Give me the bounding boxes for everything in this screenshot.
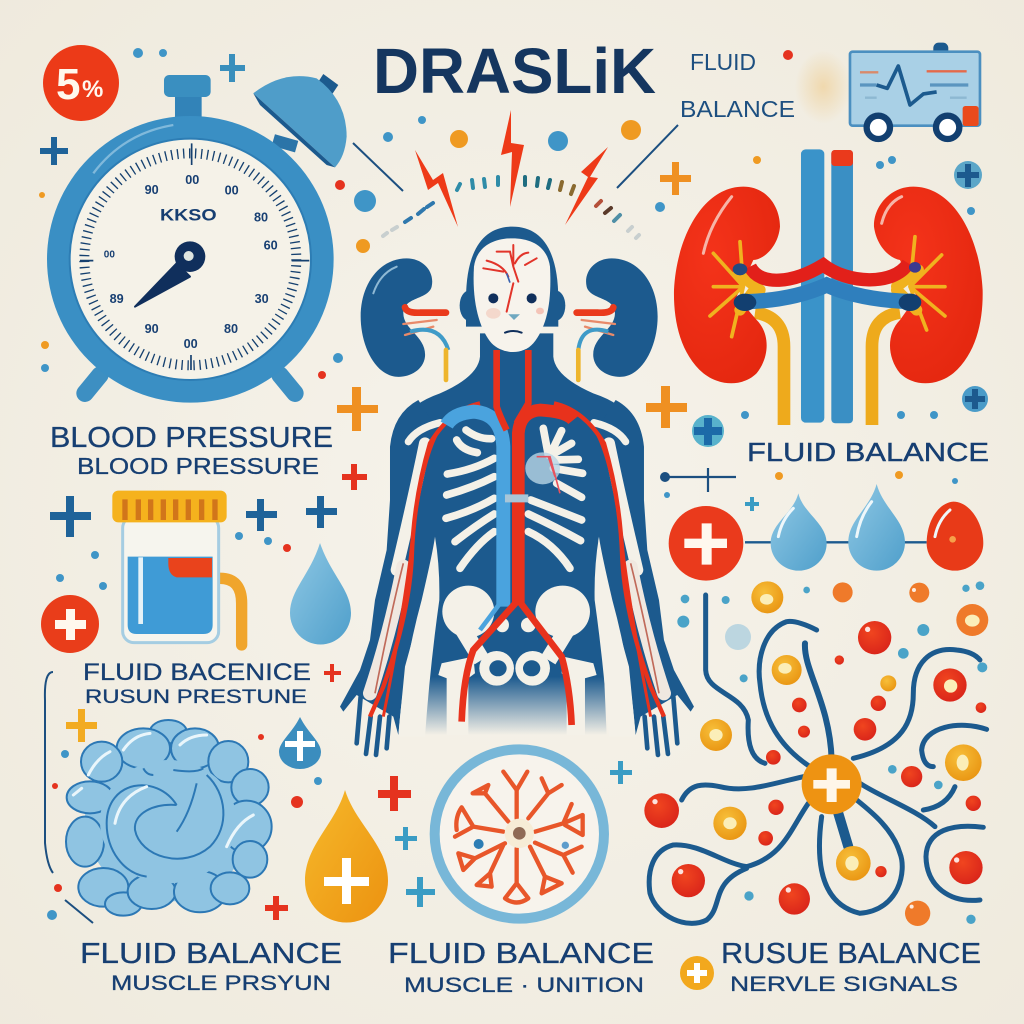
badge: 5%: %: [82, 76, 103, 103]
label: fluid balance bottom left: MUSCLE PRSYUN: [111, 972, 331, 995]
heart: [525, 452, 560, 484]
nerve network: [644, 581, 988, 926]
label: fluid balance center: [388, 938, 654, 997]
label: blood pressure: BLOOD PRESSURE: [50, 422, 333, 454]
gauge: blood pressure: 00: [225, 184, 239, 198]
gauge: blood pressure: 90: [145, 183, 159, 197]
pale ball: [725, 624, 751, 650]
pointer lines: [45, 125, 678, 923]
gauge: blood pressure: 60: [264, 239, 278, 253]
ball highlights: [709, 594, 980, 871]
gauge: blood pressure: 80: [254, 210, 268, 224]
icon: plus drop: [279, 717, 321, 769]
lightning bolts: [415, 110, 608, 227]
label: blood pressure: BLOOD PRESSURE: [77, 453, 319, 479]
label: rusue balance: [721, 938, 981, 996]
large kidneys: [674, 149, 983, 425]
pelvic openings: [489, 660, 540, 676]
icon: orange drop: [305, 790, 388, 922]
label: fluid balance left: [83, 659, 311, 708]
central vessels: [447, 350, 573, 725]
scattered dots: [39, 48, 975, 920]
gauge: blood pressure: 30: [255, 292, 269, 306]
small pale and teal dots: [677, 581, 987, 924]
gauge: blood pressure: 00: [185, 173, 199, 187]
icon: plus badge left: [41, 595, 99, 653]
label: fluid balance bottom left: [80, 938, 342, 995]
heading: fluid balance top right: FLUID: [690, 49, 756, 75]
title: DRASLiK: [373, 35, 656, 107]
label: fluid balance left: FLUID BACENICE: [83, 659, 311, 686]
arc ticks: [383, 177, 639, 238]
gauge: blood pressure: 00: [184, 337, 198, 351]
pelvis bones: [438, 586, 597, 735]
blue plus discs: [692, 161, 988, 447]
orange plus signs: [66, 162, 691, 742]
drops row: [669, 484, 983, 581]
human body figure: [340, 333, 694, 755]
label: fluid balance center: FLUID BALANCE: [388, 938, 654, 970]
heading: fluid balance top right: BALANCE: [680, 96, 795, 122]
badge: 5%: [43, 45, 119, 121]
body torso: [403, 333, 630, 735]
gauge: blood pressure: 80: [224, 322, 238, 336]
circular cell: [435, 749, 604, 919]
icon: ambulance monitor: [795, 43, 980, 139]
icon: brain: [66, 720, 272, 916]
connector with cross: [660, 468, 736, 492]
label: rusue balance: RUSUE BALANCE: [721, 938, 981, 970]
gauge: blood pressure: KKSO: [160, 206, 217, 225]
label: fluid balance right: FLUID BALANCE: [747, 437, 989, 467]
head: [460, 227, 565, 352]
scattered blue plus signs: [40, 54, 759, 907]
label: fluid balance bottom left: FLUID BALANCE: [80, 938, 342, 970]
gauge: blood pressure: 89: [110, 292, 124, 306]
label: blood pressure: [50, 422, 333, 479]
yellow balls: [700, 581, 982, 881]
badge: 5%: 5: [56, 60, 80, 109]
ribs: [446, 428, 583, 568]
label: fluid balance center: MUSCLE · UNITION: [404, 974, 644, 997]
gauge: blood pressure: 90: [145, 322, 159, 336]
label: rusue balance: NERVLE SIGNALS: [730, 973, 958, 996]
gauge: blood pressure: [47, 74, 347, 403]
icon: small plus badge bottom right: [680, 956, 714, 990]
glossy dots: [652, 588, 959, 909]
icon: small kidney right: [577, 258, 658, 380]
red balls: [644, 621, 986, 915]
red plus signs: [265, 464, 411, 920]
icon: small kidney left: [361, 258, 448, 380]
left arm: [340, 400, 480, 755]
label: fluid balance left: RUSUN PRESTUNE: [85, 687, 307, 708]
gauge: blood pressure: 00: [104, 249, 115, 260]
orange balls: [833, 582, 988, 926]
icon: jar: [112, 491, 242, 645]
heading: fluid balance top right: [680, 49, 795, 122]
icon: water drop left: [290, 543, 351, 645]
